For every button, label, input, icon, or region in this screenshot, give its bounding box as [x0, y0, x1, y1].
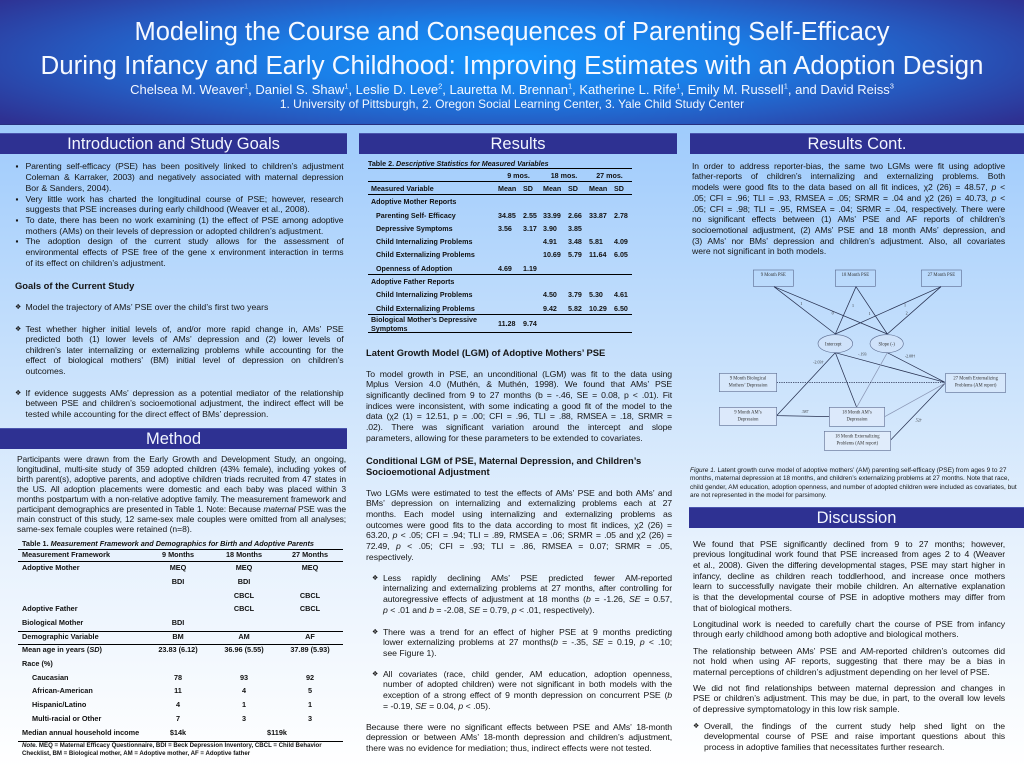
table 2: descriptive statistics: Measured Variable [371, 185, 434, 193]
node: 9 month AM depression [719, 407, 777, 425]
table 2: descriptive statistics: Depressive Symptoms [376, 225, 453, 233]
table 2: descriptive statistics: 4.61 [614, 291, 628, 299]
panel: results: ❖ [372, 574, 378, 582]
table 2: descriptive statistics: 3.85 [568, 225, 582, 233]
table 1: measurement framework and demographics: Hispanic/Latino [32, 700, 86, 709]
table 1: measurement framework and demographics: 9 Months [162, 550, 194, 558]
table 1: measurement framework and demographics: 11 [174, 686, 182, 695]
table 2: descriptive statistics: Mean [589, 185, 607, 193]
node: 18 month externalizing problems: Problems (AM report) [837, 442, 879, 447]
table 1 caption: Table 1. Measurement Framework and Demographics for Birth and Adoptive Parents [22, 539, 314, 548]
text block: latent growth model [366, 369, 672, 443]
goal 3: If evidence suggests AMs’ depression as a potential mediator of the relationship [26, 388, 344, 398]
text block: introduction bullets: The adoption design of the current study allows for the assessment of [26, 236, 344, 246]
table 1: measurement framework and demographics: $119k [267, 728, 287, 737]
table 2: descriptive statistics: 3.90 [543, 225, 557, 233]
table 2: descriptive statistics: 11.28 [498, 320, 515, 328]
path coefficients: -2.08† [905, 353, 915, 358]
table 1: measurement framework and demographics: 37.89 (5.93) [290, 645, 330, 654]
text block: maternal depression: We did not find relationships between maternal depression and changes in [693, 683, 1005, 693]
node: 18 month externalizing problems: 18 Month Externalizing [835, 435, 880, 440]
text block: decline finding: previous longitudinal work found that PSE increased from ages 2 to 4 (Weaver [693, 549, 1005, 559]
table 1: measurement framework and demographics: 92 [306, 673, 314, 682]
panel: introduction and study goals: ▪ [16, 215, 18, 225]
text block: reporter bias [693, 646, 1005, 677]
affiliations: 1. University of Pittsburgh, 2. Oregon Social Learning Center, 3. Yale Child Study Center [280, 97, 744, 111]
table 2: descriptive statistics: 9 mos. [507, 172, 530, 180]
path coefficients: 2 [906, 311, 908, 316]
result bullet 2: see Figure 1). [383, 648, 437, 658]
node: 27 month PSE: 27 Month PSE [928, 273, 955, 278]
text block: introduction bullets: environmental effects of PSE free of the gene x environment interaction in terms [26, 247, 344, 257]
table 1: measurement framework and demographics: Multi-racial or Other [32, 714, 101, 723]
table 2: descriptive statistics: 6.50 [614, 305, 628, 313]
table 1: measurement framework and demographics: 1 [308, 700, 312, 709]
path coefficients: .587 [802, 409, 808, 414]
node: 9 month biological mothers depression: 9 Month Biological [730, 377, 767, 382]
text block: method description: birth parent(s), adoptive parents, and adoptive children triads recruited from 47 states in [17, 474, 346, 484]
table 1: measurement framework and demographics: BDI [172, 577, 184, 586]
text block: decline finding: et al., 2008). Given the differing developmental stages, PSE may start higher in [693, 560, 1005, 570]
table 2: descriptive statistics: 4.91 [543, 238, 557, 246]
panel: results [359, 133, 677, 753]
node: 9 month biological mothers depression: Mothers’ Depression [729, 383, 768, 388]
text block: method description: main construct of this study, 12 same-sex male couples were omitted from all analyses; [17, 514, 346, 524]
table 1: measurement framework and demographics: 93 [240, 673, 248, 682]
table 2: descriptive statistics: 9.42 [543, 305, 557, 313]
text block: method description: longitudinal, multi-site study of 359 adopted children (43% female), including yokes of [17, 464, 346, 474]
node: 9 month AM depression: Depression [738, 418, 759, 423]
text block: maternal depression: PSE or children’s adjustment. This may be due, in part, to the overall low levels [693, 693, 1005, 703]
table 2 caption: Table 2. Descriptive Statistics for Measured Variables [368, 160, 549, 168]
goal 2: children’s later internalizing or externalizing problems while accounting for the [26, 345, 344, 355]
table 1: measurement framework and demographics: Adoptive Mother [22, 563, 80, 572]
goal 2: predicted both (1) lower levels of AMs’ depression and (2) lower levels of [26, 334, 344, 344]
table 1: measurement framework and demographics: Mean age in years (SD) [22, 645, 102, 654]
table 2: descriptive statistics: 2.55 [523, 212, 537, 220]
table 2: descriptive statistics: 3.79 [568, 291, 582, 299]
table 2: descriptive statistics: 5.81 [589, 238, 603, 246]
text block: father reports: models were good fits to the data based on all fit indices, χ2 (26) = 48.57, p < [692, 182, 1005, 192]
text block: decline finding: is that the developmental course of PSE in adoptive mothers may differ from [693, 592, 1005, 602]
text block: father reports: socioemotional adjustment, (2) AMs’ PSE and 18 month AMs’ depression, and [692, 225, 1005, 235]
table 2: descriptive statistics: SD [568, 185, 578, 193]
result bullet 1: internalizing and externalizing problems at 27 months, after controlling for [383, 583, 672, 593]
table 2: descriptive statistics: 3.56 [498, 225, 512, 233]
text block: method description: Participants were drawn from the Early Growth and Development Study, an ongoing, [17, 454, 346, 464]
text block: decline finding [693, 539, 1005, 613]
table 1: measurement framework and demographics: CBCL [234, 591, 254, 600]
panel: introduction and study goals [0, 133, 347, 419]
text block: method description: same-sex female couples were retained (n=8). [17, 524, 192, 534]
figure 1 caption: months, maternal depression at 18 months, and children’s externalizing problems at 27 months. Note that race, [690, 475, 1009, 482]
table 2: descriptive statistics: 5.79 [568, 251, 582, 259]
table 1: measurement framework and demographics: BDI [238, 577, 250, 586]
text block: mediation conclusion: Because there were no significant effects between PSE and AMs’ 18-month [366, 722, 672, 732]
result bullet 1: Less rapidly declining AMs’ PSE predicted fewer AM-reported [383, 573, 672, 583]
table 2: descriptive statistics: 2.78 [614, 212, 628, 220]
node: 27 month externalizing problems: Problems (AM report) [955, 383, 997, 388]
panel: results: ❖ [372, 628, 378, 636]
text block: decline finding: infancy, decline as children reach toddlerhood, and increase once mothers [693, 571, 1005, 581]
text block: method description: the US. All adoption placements were domestic and each baby was placed within 3 [17, 484, 346, 494]
table 2: descriptive statistics: Symptoms [371, 325, 408, 333]
table 2: descriptive statistics: Child Externalizing Problems [376, 251, 475, 259]
text block: reporter bias: not hold when using AF reports, suggesting that there may be a bias in [693, 656, 1005, 666]
node: slope: Slope (-) [878, 342, 895, 347]
table 1: measurement framework and demographics: 78 [174, 673, 182, 682]
panel: discussion: ❖ [693, 722, 699, 730]
table 1: measurement framework and demographics: 5 [308, 686, 312, 695]
table 1: measurement framework and demographics: Caucasian [32, 673, 69, 682]
table 1: measurement framework and demographics: MEQ [236, 563, 252, 572]
text block: mediation conclusion [366, 722, 672, 753]
table 2: descriptive statistics: 11.64 [589, 251, 606, 259]
path coefficients: -.193 [858, 352, 867, 357]
table 2: descriptive statistics: 27 mos. [596, 172, 623, 180]
panel: introduction and study goals: ❖ [15, 303, 21, 311]
path coefficients: -2.03† [813, 360, 824, 365]
text block: introduction bullets: To date, there has been no work examining (1) the effect of PSE among adoptive [26, 215, 344, 225]
table 1: measurement framework and demographics [18, 539, 343, 757]
text block: introduction bullets: Parenting self-efficacy (PSE) has been positively linked to children’s adjustment [26, 161, 344, 171]
node: 9 month AM depression: 9 Month AM’s [734, 411, 762, 416]
text block: latent growth model: data (χ2 (1) = 12.51, p = .00; CFI = .96, TLI = .88, RMSEA = .18, SRMR = [366, 411, 672, 421]
text block: latent growth model: indices were inconsistent, with some indicating a good fit of the model to the [366, 401, 672, 411]
goal 3 [15, 388, 344, 419]
node: intercept: Intercept [825, 342, 842, 347]
table 2: descriptive statistics: 5.30 [589, 291, 603, 299]
conclusion bullet: developmental course of PSE and raise important questions about this [704, 731, 1005, 741]
text block: introduction bullets: suggests that PSE increases during early childhood (Weaver et al., 2008). [26, 204, 310, 214]
table 1: measurement framework and demographics: CBCL [234, 604, 254, 613]
title: During Infancy and Early Childhood: Improving Estimates with an Adoption Design [40, 52, 983, 80]
panel: results continued [690, 133, 1024, 499]
text block: longitudinal work [693, 619, 1005, 639]
path coefficients: 0 [832, 311, 834, 316]
figure 1 caption: child gender, AM education, adoption openness, and number of adopted children were included as covariates, but [690, 484, 1017, 491]
text block: conditional LGM: 72.49, p < .05; CFI = .93; TLI = .86, RMSEA = 0.07; SRMR = .05, [366, 541, 672, 551]
node: 9 month PSE: 9 Month PSE [761, 273, 786, 278]
table 2: descriptive statistics: Openness of Adoption [376, 265, 452, 273]
heading: introduction: Introduction and Study Goals [67, 135, 280, 153]
table 1: measurement framework and demographics: AM [238, 632, 250, 641]
table 1: measurement framework and demographics: MEQ [170, 563, 186, 572]
text block: introduction bullets: mothers (AMs) on their levels of depression or adopted children’s adjustment. [26, 226, 323, 236]
table 1: measurement framework and demographics: 4 [242, 686, 246, 695]
text block: father reports: were not significant in both models. [692, 246, 826, 256]
table 1 note: Note. MEQ = Maternal Efficacy Questionnaire, BDI = Beck Depression Inventory, CBCL = Child Behavior [22, 742, 322, 749]
header banner [0, 0, 1024, 125]
result bullet 1: p < .01 and b = -2.08, SE = 0.79, p < .01, respectively). [383, 605, 595, 615]
authors: Chelsea M. Weaver1, Daniel S. Shaw1, Leslie D. Leve2, Lauretta M. Brennan1, Katherine L. Rife1, Emily M. Russell1, and David Reiss3 [130, 82, 894, 97]
table 1: measurement framework and demographics: 18 Months [226, 550, 262, 558]
text block: latent growth model: parameters, allowing for these parameters to be extended to covariates. [366, 433, 643, 443]
text block: father reports: no significant effects between (1) AMs’ PSE and AF reports of children’s [692, 214, 1005, 224]
panel: introduction and study goals: ▪ [16, 194, 18, 204]
table 1: measurement framework and demographics: BDI [172, 618, 184, 627]
heading: method: Method [146, 430, 201, 448]
goal 2: outcomes. [26, 366, 66, 376]
text block: father reports: father-reports of children’s internalizing and externalizing problems. Both [692, 171, 1005, 181]
result bullet 3: All covariates (race, child gender, AM education, adoption openness, [383, 669, 672, 679]
node: 18 month AM depression: Depression [847, 418, 868, 423]
text block: latent growth model: significantly declined from 9 to 27 months (b = -.46, SE = 0.08, p < .01). Fit [366, 390, 672, 400]
goal 2: Test whether higher initial levels of, and/or more rapid change in, AMs’ PSE [26, 324, 344, 334]
table 1: measurement framework and demographics: 4 [176, 700, 180, 709]
table 2: descriptive statistics: 5.82 [568, 305, 582, 313]
text block: latent growth model: To model growth in PSE, an unconditional (LGM) was fit to the data using [366, 369, 672, 379]
table 1: measurement framework and demographics: $14k [170, 728, 186, 737]
node: 27 month PSE [921, 270, 961, 286]
result bullet 2: lower externalizing problems at 27 months(b = -.35, SE = 0.19, p < .10; [383, 637, 672, 647]
table 2: descriptive statistics: 2.66 [568, 212, 582, 220]
title [40, 18, 983, 80]
text block: conditional LGM: outcomes were good fits to the data according to most fit indices, χ2 (26) = [366, 520, 672, 530]
result bullet 3: = -0.19, SE = 0.04, p < .05). [383, 701, 490, 711]
path coefficients: 1 [904, 302, 906, 307]
result bullet 1: autoregressive effects of adjustment at 18 months (b = -1.26, SE = 0.57, [383, 594, 672, 604]
text block: conditional LGM: 63.20, p < .05; CFI = .94; TLI = .89, RMSEA = .06; SRMR = .05 and χ2 (26) = [366, 530, 672, 540]
node: 18 month externalizing problems [824, 431, 891, 450]
text block: conditional LGM [366, 488, 672, 562]
table 2: descriptive statistics: Child Internalizing Problems [376, 238, 472, 246]
node: 27 month externalizing problems [946, 373, 1006, 392]
figure 1 caption: are not represented in the model for parsimony. [690, 492, 826, 499]
table 2: descriptive statistics: 18 mos. [551, 172, 577, 180]
text block: decline finding: We found that PSE significantly declined from 9 to 27 months; however, [693, 539, 1005, 549]
figure 1 caption: Figure 1. Latent growth curve model of adoptive mothers’ (AM) parenting self-efficacy (PSE) from ages 9 to 27 [690, 467, 1006, 474]
goal 2 [15, 324, 344, 376]
table 1: measurement framework and demographics: BM [172, 632, 184, 641]
table 1: measurement framework and demographics: 3 [242, 714, 246, 723]
table 2: descriptive statistics: 10.29 [589, 305, 607, 313]
text block: conditional LGM: months. Each model using internalizing and externalizing problems as [366, 509, 672, 519]
result bullet 2 [372, 627, 672, 658]
node: 9 month PSE [753, 270, 793, 286]
node: 18 month AM depression [829, 407, 885, 426]
conclusion bullet: process in adoptive families that necessitates further research. [704, 742, 944, 752]
heading: introduction [0, 133, 347, 154]
panel: results: ❖ [372, 670, 378, 678]
heading: results: Results [490, 135, 546, 153]
text block: introduction bullets [16, 161, 344, 268]
text block: decline finding: that of biological mothers. [693, 603, 792, 613]
text block: conditional LGM: BMs’ depression on internalizing and externalizing problems each at 27 [366, 498, 672, 508]
goal 3: tested while accounting for the direct effect of BMs’ depression. [26, 409, 268, 419]
table 1: measurement framework and demographics: Median annual household income [22, 728, 139, 737]
table 2: descriptive statistics: Mean [498, 185, 516, 193]
table 1 note [22, 742, 322, 757]
table 2: descriptive statistics: Child Externalizing Problems [376, 305, 475, 313]
node: 18 month AM depression: 18 Month AM’s [842, 411, 872, 416]
table 2: descriptive statistics: Parenting Self- Efficacy [376, 212, 456, 220]
goal 1: Model the trajectory of AMs’ PSE over the child’s first two years [26, 302, 268, 312]
result bullet 3: exception of a strong effect of 9 month depression on concurrent PSE (b [383, 690, 672, 700]
heading: discussion [689, 507, 1024, 528]
text block: conditional LGM: Two LGMs were estimated to test the effects of AMs’ PSE and both AMs’ and [366, 488, 672, 498]
result bullet 1 [372, 573, 672, 615]
table 2: descriptive statistics: 3.48 [568, 238, 582, 246]
text block: introduction bullets: of its effect on children’s adjustment. [26, 258, 166, 268]
text block: reporter bias: maternal perceptions of children’s adjustment depending on her level of PSE. [693, 667, 990, 677]
panel: introduction and study goals: ❖ [15, 389, 21, 397]
table 1: measurement framework and demographics: 3 [308, 714, 312, 723]
table 2: descriptive statistics: Mean [543, 185, 561, 193]
table 2: descriptive statistics: Adoptive Father Reports [371, 278, 454, 286]
panel: introduction and study goals: ▪ [16, 236, 18, 246]
table 1: measurement framework and demographics: Measurement Framework [22, 550, 110, 558]
table 1: measurement framework and demographics: Race (%) [22, 659, 53, 668]
heading: results [359, 133, 677, 154]
table 1: measurement framework and demographics: CBCL [300, 604, 320, 613]
table 1: measurement framework and demographics: Biological Mother [22, 618, 83, 627]
text block: reporter bias: The relationship between AMs’ PSE and AM-reported children’s outcomes did [693, 646, 1005, 656]
text block: father reports: .05; CFI = .96; TLI = .93, RMSEA = .05; SRMR = .04 and χ2 (26) = 40.73, p < [692, 193, 1005, 203]
table 2: descriptive statistics: Biological Mother’s Depressive [371, 316, 477, 324]
figure 1: latent growth path diagram [719, 270, 1006, 451]
text block: maternal depression: of depressive symptomatology in this low risk sample. [693, 704, 900, 714]
text block: latent growth model: .02). There was significant variation around the intercept and slope [366, 422, 672, 432]
table 2: descriptive statistics: 6.05 [614, 251, 628, 259]
table 2: descriptive statistics: 4.69 [498, 265, 512, 273]
table 2: descriptive statistics: Child Internalizing Problems [376, 291, 472, 299]
node: slope [870, 335, 903, 353]
table 2: descriptive statistics: 34.85 [498, 212, 516, 220]
goal 2: effect of biological mothers’ (BM) initial level of depression on children’s [26, 355, 344, 365]
result bullet 3: number of adopted children) were not significant in both models with the [383, 679, 672, 689]
path coefficients: 1 [869, 311, 871, 316]
table 1: measurement framework and demographics: 23.83 (6.12) [158, 645, 198, 654]
conclusion bullet: Overall, the findings of the current study help shed light on the [704, 721, 1005, 731]
node: 27 month externalizing problems: 27 Month Externalizing [953, 377, 999, 382]
heading: conditional LGM: Conditional LGM of PSE, Maternal Depression, and Children’s [366, 454, 641, 466]
node: 9 month biological mothers depression [719, 373, 777, 392]
table 1: measurement framework and demographics: AF [305, 632, 315, 641]
text block: father reports: In order to address reporter-bias, the same two LGMs were fit using adoptive [692, 161, 1005, 171]
text block: method description: participant demographics are presented in Table 1. Note: Because maternal PSE was the [17, 504, 346, 514]
heading: latent growth model: Latent Growth Model (LGM) of Adoptive Mothers’ PSE [366, 346, 605, 358]
text block: method description: months postpartum with a non-relative adoptive family. The measurement framework and [17, 494, 346, 504]
heading: conditional LGM: Socioemotional Adjustment [366, 466, 490, 476]
title: Modeling the Course and Consequences of Parenting Self-Efficacy [134, 18, 890, 46]
heading: results cont [690, 133, 1024, 154]
text block: introduction bullets: Coleman & Karraker, 2003) and negatively associated with maternal depression [26, 172, 344, 182]
text block: latent growth model: Mplus Version 4.0 (Muthén, & Muthén, 1998). We found that AMs’ PSE [366, 379, 672, 389]
table 2: descriptive statistics: 4.50 [543, 291, 557, 299]
text block: mediation conclusion: depression or between AMs’ 18-month depression and children’s adjustment, [366, 732, 672, 742]
conclusion bullet [693, 721, 1005, 752]
path coefficients [800, 301, 922, 422]
heading: discussion: Discussion [817, 509, 896, 527]
goal 3: between PSE and children’s socioemotional adjustment, the indirect effect will be [26, 398, 344, 408]
result bullet 3 [372, 669, 672, 711]
table 2: descriptive statistics: 3.17 [523, 225, 537, 233]
text block: introduction bullets: Bor & Sanders, 2004). [26, 183, 111, 193]
text block: father reports [692, 161, 1005, 256]
result bullet 2: There was a trend for an effect of higher PSE at 9 months predicting [383, 627, 672, 637]
table 1: measurement framework and demographics: 36.96 (5.55) [224, 645, 264, 654]
text block: longitudinal work: through early childhood among both adoptive and biological mothers. [693, 629, 959, 639]
heading: goals: Goals of the Current Study [15, 280, 134, 290]
text block: conditional LGM: respectively. [366, 552, 414, 562]
table 1 note: Checklist, BM = Biological mother, AM = Adoptive mother, AF = Adoptive father [22, 750, 250, 757]
text block: mediation conclusion: there was no evidence for mediation; thus, indirect effects were not tested. [366, 743, 652, 753]
table 2: descriptive statistics: 1.19 [523, 265, 537, 273]
node: intercept [818, 335, 853, 353]
text block: father reports: (3) AMs’ nor BMs’ depression and children’s adjustment. Also, all covariates [692, 236, 1005, 246]
panel: discussion [689, 507, 1024, 752]
text block: father reports: .05; CFI = .98; TLI = .95, RMSEA = .04; SRMR = .04, respectively. There were [692, 204, 1005, 214]
table 1: measurement framework and demographics: 7 [176, 714, 180, 723]
table 2: descriptive statistics: SD [523, 185, 533, 193]
text block: longitudinal work: Longitudinal work is needed to carefully chart the course of PSE from infancy [693, 619, 1005, 629]
table 1: measurement framework and demographics: African-American [32, 686, 93, 695]
panel: introduction and study goals: ▪ [16, 161, 18, 171]
table 2: descriptive statistics: 33.99 [543, 212, 561, 220]
table 1: measurement framework and demographics: CBCL [300, 591, 320, 600]
table 1: measurement framework and demographics: Adoptive Father [22, 604, 78, 613]
text block: introduction bullets: Very little work has charted the longitudinal course of PSE; however, research [26, 194, 344, 204]
table 2: descriptive statistics: 10.69 [543, 251, 561, 259]
table 1: measurement framework and demographics: MEQ [302, 563, 318, 572]
node: 18 month PSE [835, 270, 875, 286]
table 1: measurement framework and demographics: 1 [242, 700, 246, 709]
panel: method [0, 428, 347, 757]
heading: method [0, 428, 347, 449]
node: 18 month PSE: 18 Month PSE [842, 273, 869, 278]
text block: method description [17, 454, 346, 534]
text block: maternal depression [693, 683, 1005, 714]
table 1: measurement framework and demographics: 27 Months [292, 550, 328, 558]
table 2: descriptive statistics: Adoptive Mother Reports [371, 198, 456, 206]
heading: conditional LGM [366, 454, 641, 477]
figure 1 caption [690, 467, 1017, 499]
path coefficients: 1 [852, 303, 854, 308]
table 1: measurement framework and demographics: Demographic Variable [22, 632, 99, 641]
table 2: descriptive statistics: SD [614, 185, 624, 193]
text block: decline finding: learn to successfully navigate their mobile children. An alternative explanation [693, 581, 1005, 591]
table 2: descriptive statistics: 33.87 [589, 212, 607, 220]
table 2: descriptive statistics: 4.09 [614, 238, 628, 246]
heading: results cont: Results Cont. [807, 135, 907, 153]
path coefficients: .52† [915, 417, 922, 422]
table 2: descriptive statistics [368, 160, 632, 333]
panel: introduction and study goals: ❖ [15, 325, 21, 333]
table 2: descriptive statistics: 9.74 [523, 320, 537, 328]
path coefficients: 1 [800, 301, 802, 306]
